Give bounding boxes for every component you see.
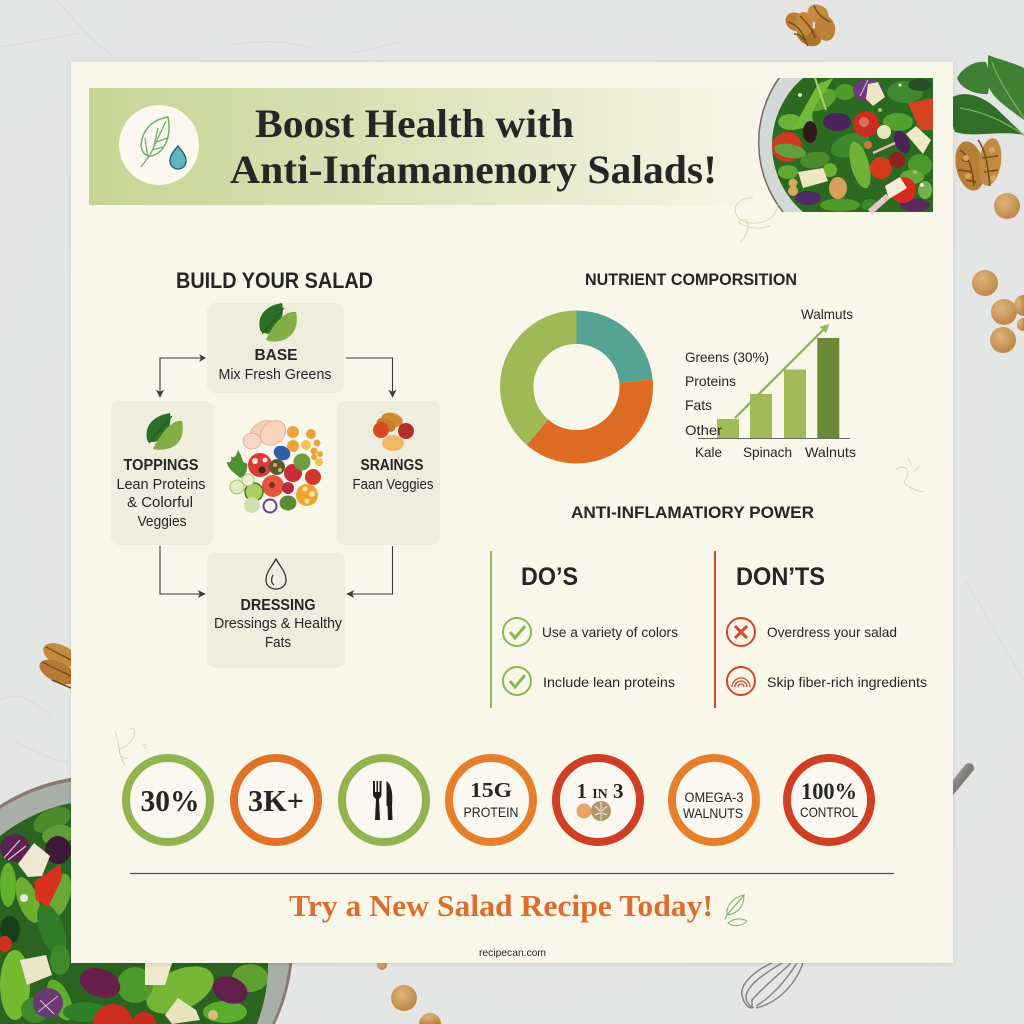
decoration: whisk [742, 963, 803, 1008]
icon: check [503, 667, 531, 695]
panel: base: Mix Fresh Greens [218, 367, 332, 383]
labels: Greens (30%) [685, 349, 769, 365]
stat: 100% control [787, 758, 871, 842]
stat: 100% control: CONTROL [800, 804, 858, 820]
arrow: base to toppings [160, 358, 205, 397]
title [230, 101, 717, 192]
icon: cross [727, 618, 755, 646]
heading: build your salad: BUILD YOUR SALAD [176, 268, 373, 293]
stat: 15g protein [449, 758, 533, 842]
panel: toppings: & Colorful [127, 495, 193, 511]
icon: knife [386, 781, 392, 820]
stat: 100% control: 100% [801, 779, 857, 804]
icon: fork [373, 781, 382, 820]
labels: Walmuts [801, 306, 853, 322]
title: Anti-Infamanenory Salads! [230, 147, 717, 192]
decoration: whisk handle [953, 763, 974, 795]
panel: toppings: Lean Proteins [116, 477, 206, 493]
arrow: base head [199, 354, 206, 362]
icon: nut pair [576, 801, 611, 821]
stat: 15g protein: 15G [470, 778, 512, 802]
stat: 3K+ [234, 758, 318, 842]
labels: Spinach [743, 444, 792, 460]
panel: don'ts [715, 551, 927, 708]
header banner [89, 78, 933, 212]
icon: leaf and water drop [119, 105, 199, 185]
icon: rainbow [727, 667, 755, 695]
heading: anti-inflammatory power: ANTI-INFLAMATIORY POWER [571, 503, 814, 522]
arrow: toppings to dressing [160, 546, 205, 594]
stat: 15g protein: PROTEIN [464, 804, 518, 820]
stat: 30% [126, 758, 210, 842]
panel: toppings: Veggies [138, 514, 186, 530]
labels: Other [685, 422, 722, 438]
source note: recipecan.com [479, 947, 546, 959]
panel: dressing: DRESSING [240, 597, 316, 614]
photo: salad bowl [758, 78, 933, 212]
labels [685, 306, 856, 460]
chart: nutrient donut [500, 310, 653, 463]
panel: main card [71, 62, 953, 963]
decoration: scribble above stats [115, 728, 146, 765]
arrow: srainings to dressing [347, 546, 392, 594]
icon: cta leaves [725, 895, 747, 925]
panel: srainings [337, 401, 440, 545]
panel: don'ts: DON’TS [736, 563, 825, 591]
icon: drop [266, 559, 286, 589]
decoration: walnut top [782, 1, 838, 50]
panel: do's [491, 551, 678, 708]
stat: omega-3 walnuts: WALNUTS [683, 806, 743, 821]
banner background [89, 88, 763, 205]
stat: 30%: 30% [140, 783, 200, 818]
panel: toppings: TOPPINGS [124, 457, 198, 474]
chart: bar chart [685, 306, 856, 460]
icon: greens [146, 413, 183, 450]
decoration: hazelnuts and chickpeas [377, 193, 1024, 1024]
arrow: base to srainings [346, 358, 392, 397]
stat: 1 in 3: 1 IN 3 [576, 779, 624, 803]
panel: dressing: Fats [265, 635, 291, 651]
decoration: walnut right [951, 137, 1004, 193]
labels: Proteins [685, 373, 736, 389]
icon: check [503, 618, 531, 646]
heading: nutrient composition: NUTRIENT COMPORSITION [585, 270, 797, 289]
illustration: salad ingredients [227, 416, 323, 513]
stat: fork and knife [342, 758, 426, 842]
decoration: small scribble [896, 458, 924, 492]
icon: beans and vegetables [373, 410, 414, 451]
axis [698, 438, 850, 440]
decoration: salad bowl bottom left [0, 775, 292, 1024]
decoration: green scribble header [735, 198, 778, 242]
panel: don'ts: Overdress your salad [767, 624, 897, 640]
stat: 3K+: 3K+ [248, 783, 304, 818]
labels: Walnuts [805, 444, 856, 460]
panel: dressing: Dressings & Healthy [214, 616, 343, 632]
labels: Fats [685, 397, 712, 413]
panel: do's: Use a variety of colors [542, 624, 678, 640]
panel: don'ts: Skip fiber-rich ingredients [767, 674, 927, 690]
panel: do's: DO’S [521, 563, 578, 591]
divider [130, 872, 894, 874]
stat: omega-3 walnuts: OMEGA-3 [684, 790, 744, 805]
panel: srainings: SRAINGS [360, 457, 424, 474]
panel: base [207, 303, 344, 393]
stat: 1 in 3 [556, 758, 640, 842]
icon: greens [259, 303, 297, 342]
panel: toppings [111, 401, 213, 545]
call to action: Try a New Salad Recipe Today! [289, 888, 713, 923]
panel: do's: Include lean proteins [543, 674, 675, 690]
arrow: trend [735, 325, 828, 418]
bars [717, 338, 839, 438]
panel: srainings: Faan Veggies [352, 477, 434, 493]
labels: Kale [695, 444, 722, 460]
stat: omega-3 walnuts [672, 758, 756, 842]
panel: base: BASE [254, 347, 298, 364]
panel: dressing [207, 553, 345, 668]
decoration: walnut left [36, 638, 81, 690]
decoration: spinach leaves right [951, 55, 1024, 135]
title: Boost Health with [255, 101, 574, 146]
